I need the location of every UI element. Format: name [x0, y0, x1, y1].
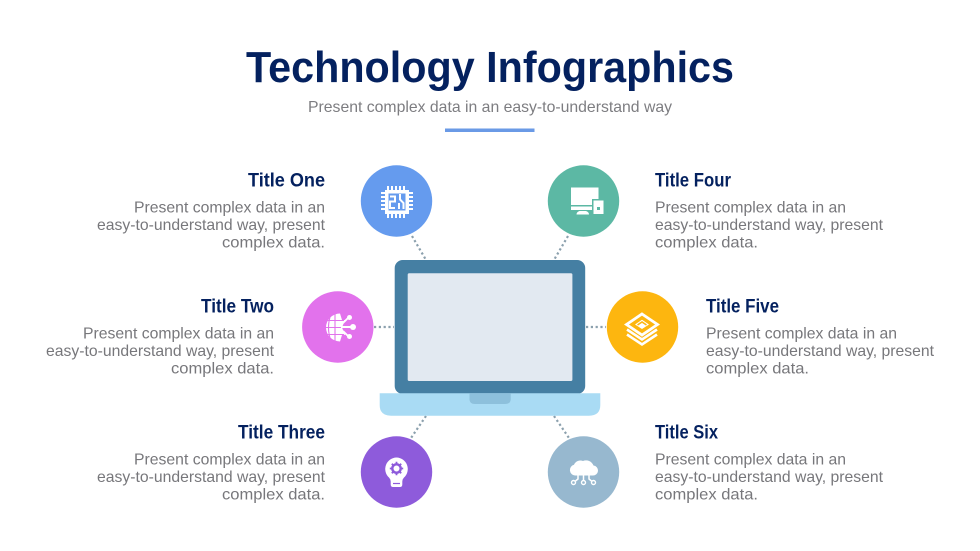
laptop screen — [408, 273, 572, 381]
laptop frame — [395, 260, 585, 394]
heading: title four: Title Four — [655, 170, 732, 192]
laptop — [380, 260, 600, 416]
body text: title six: complex data. — [655, 487, 758, 504]
body text: title six: easy-to-understand way, present — [655, 469, 884, 486]
circle: title three — [361, 436, 432, 508]
circle: title two — [302, 291, 373, 363]
body text: title one: complex data. — [222, 235, 325, 252]
connector: title two — [374, 326, 394, 328]
title: Technology Infographics — [246, 43, 734, 92]
body text: title four: Present complex data in an — [655, 200, 846, 217]
body text: title five: easy-to-understand way, present — [706, 343, 935, 360]
circle: title five — [607, 291, 678, 363]
body text: title six: Present complex data in an — [655, 452, 846, 469]
body text: title three: Present complex data in an — [134, 452, 325, 469]
panel: title one — [97, 165, 432, 252]
body text: title five: complex data. — [706, 361, 809, 378]
laptop base — [380, 393, 600, 416]
panel: title two — [46, 291, 373, 378]
heading: title one: Title One — [248, 170, 325, 192]
body text: title one — [97, 200, 326, 252]
circle: title six — [548, 436, 619, 508]
body text: title one: easy-to-understand way, present — [97, 217, 326, 234]
subtitle: Present complex data in an easy-to-understand way — [308, 99, 672, 116]
body text: title two — [46, 326, 275, 378]
body text: title five: Present complex data in an — [706, 326, 897, 343]
heading: title three: Title Three — [238, 422, 325, 444]
icon: stacked layers — [626, 314, 658, 344]
panel: title six — [548, 422, 884, 508]
body text: title six — [655, 452, 884, 504]
heading: title two: Title Two — [201, 296, 274, 318]
heading: title five: Title Five — [706, 296, 779, 318]
body text: title one: Present complex data in an — [134, 200, 325, 217]
title underline — [445, 128, 534, 132]
icon: connected globe — [324, 313, 356, 342]
body text: title three: easy-to-understand way, present — [97, 469, 326, 486]
connector: title six — [554, 416, 569, 438]
icon: cloud network — [570, 460, 598, 484]
heading: title six: Title Six — [655, 422, 718, 444]
circle: title four — [548, 165, 619, 237]
body text: title five — [706, 326, 935, 378]
body text: title three: complex data. — [222, 487, 325, 504]
body text: title three — [97, 452, 326, 504]
icon: desktop and tower — [571, 188, 604, 214]
panel: title three — [97, 422, 432, 508]
body text: title four: complex data. — [655, 235, 758, 252]
body text: title two: Present complex data in an — [83, 326, 274, 343]
icon: light bulb with gear — [385, 458, 408, 487]
connector: title one — [412, 236, 426, 260]
icon: microchip — [381, 186, 413, 218]
body text: title two: easy-to-understand way, present — [46, 343, 275, 360]
connector: title five — [586, 326, 606, 328]
circle: title one — [361, 165, 432, 237]
laptop notch — [470, 393, 511, 404]
panel: title five — [607, 291, 935, 378]
body text: title four — [655, 200, 884, 252]
panel: title four — [548, 165, 884, 252]
body text: title two: complex data. — [171, 361, 274, 378]
body text: title four: easy-to-understand way, present — [655, 217, 884, 234]
connector: title three — [411, 416, 426, 438]
connector: title four — [554, 236, 568, 260]
